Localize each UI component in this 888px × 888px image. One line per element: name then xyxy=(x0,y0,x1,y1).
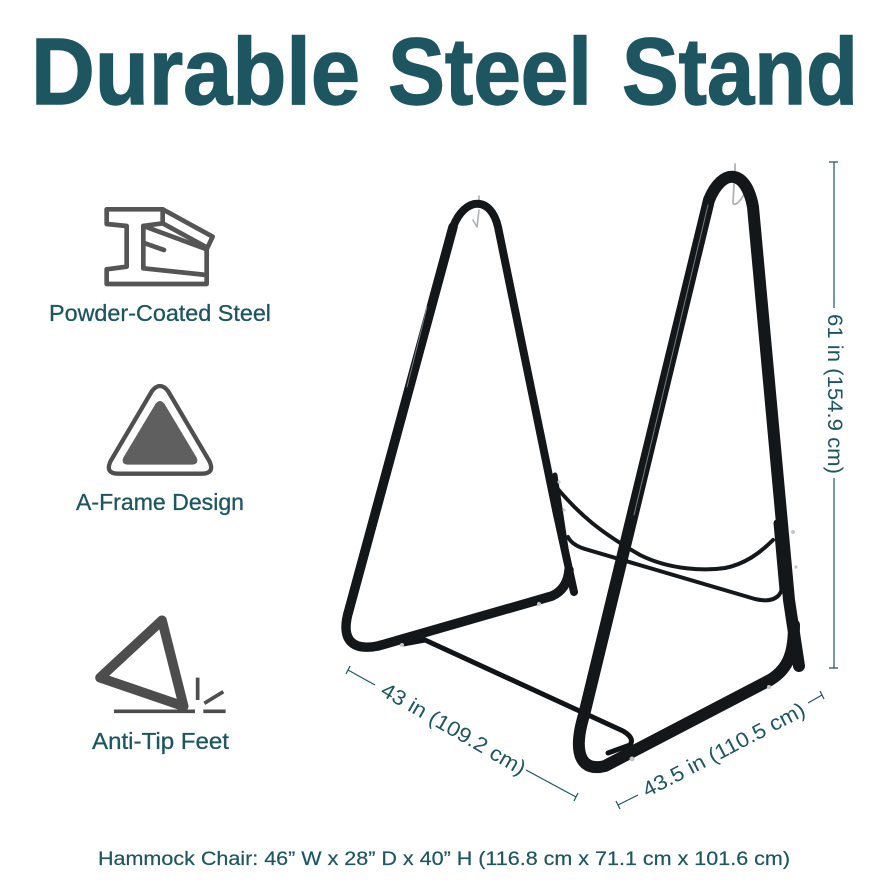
label: width dimension: 43.5 in (110.5 cm) xyxy=(639,698,809,802)
front hook xyxy=(733,164,745,204)
dimension: depth lines xyxy=(346,666,578,801)
label: a-frame design: A-Frame Design xyxy=(76,489,244,515)
label: anti-tip feet: Anti-Tip Feet xyxy=(92,728,230,754)
title: Durable xyxy=(31,19,360,125)
dimension: height xyxy=(829,162,838,668)
title: Stand xyxy=(622,19,858,125)
hammock braces xyxy=(557,488,783,600)
title xyxy=(31,19,858,125)
front A-frame xyxy=(579,177,799,767)
dimension: width lines xyxy=(616,691,824,809)
highlight lines xyxy=(407,205,708,515)
front rear-leg bracket xyxy=(777,523,783,590)
steel stand photo xyxy=(346,164,799,767)
icon: anti-tip feet xyxy=(100,620,226,711)
title: Steel xyxy=(388,19,592,125)
back frame bracket xyxy=(555,475,570,575)
icon: a-frame triangle xyxy=(109,386,211,474)
back brace tube xyxy=(403,640,631,753)
back A-frame left leg and base xyxy=(346,227,569,647)
icon: steel beam xyxy=(107,209,213,284)
back hooks xyxy=(473,196,479,227)
bolts xyxy=(400,480,798,762)
back A-frame right leg xyxy=(453,204,574,592)
label: powder-coated steel: Powder-Coated Steel xyxy=(49,300,271,326)
label: height dimension: 61 in (154.9 cm) xyxy=(823,314,846,474)
hammock chair size note: Hammock Chair: 46” W x 28” D x 40” H (116.8 cm x 71.1 cm x 101.6 cm) xyxy=(98,849,790,870)
label: depth dimension: 43 in (109.2 cm) xyxy=(377,679,530,780)
